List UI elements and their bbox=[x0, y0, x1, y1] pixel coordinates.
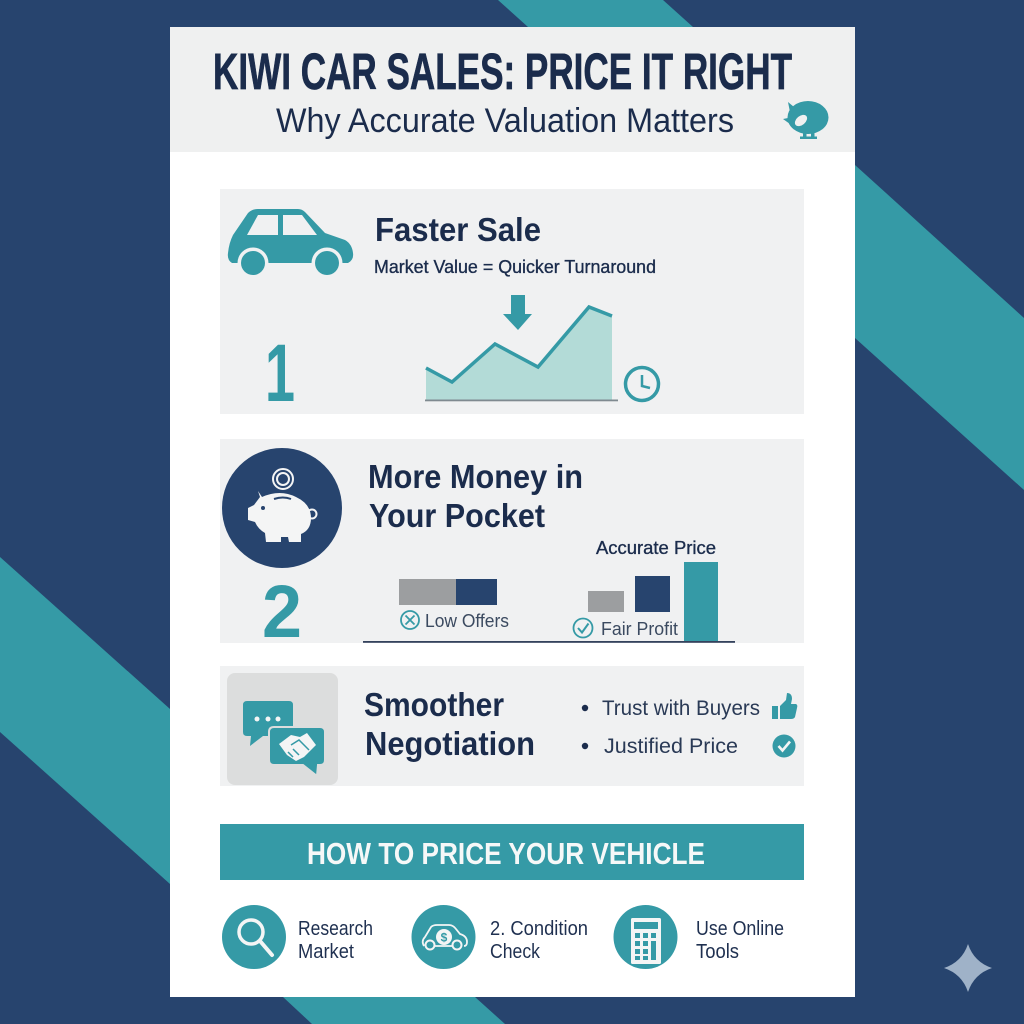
panel: header bbox=[170, 27, 855, 152]
heading: smoother negotiation: Negotiation bbox=[365, 725, 535, 762]
icon: sparkle watermark bbox=[944, 944, 992, 992]
bar: low offers bbox=[399, 579, 497, 605]
step: condition check bbox=[412, 905, 594, 969]
icon: car with dollar: $ bbox=[441, 930, 448, 944]
icon: clock bbox=[626, 368, 658, 400]
bullet: justified price: Justified Price bbox=[604, 735, 738, 758]
icon: check badge bbox=[772, 734, 796, 758]
banner: how to price bbox=[220, 824, 804, 880]
heading: faster sale: Faster Sale bbox=[375, 211, 541, 248]
icon: piggy bank bbox=[222, 448, 342, 568]
panel: more money bbox=[220, 439, 804, 653]
icon: magnifier bbox=[239, 920, 272, 955]
panel: white card bbox=[170, 27, 855, 997]
arrow: down bbox=[503, 295, 532, 330]
number 2: 2 bbox=[262, 570, 302, 653]
icon: calculator bbox=[631, 918, 661, 964]
heading: smoother negotiation: Smoother bbox=[364, 686, 504, 723]
label: fair profit: Fair Profit bbox=[601, 619, 678, 639]
icon: car bbox=[228, 209, 353, 278]
icon: thumbs up bbox=[772, 693, 797, 719]
step: research market bbox=[222, 905, 379, 969]
bars: accurate price bbox=[588, 562, 718, 642]
icon: kiwi bird bbox=[783, 101, 828, 139]
label: research market: Market bbox=[298, 941, 354, 963]
bullet: trust with buyers: Trust with Buyers bbox=[602, 697, 760, 720]
label: condition check: 2. Condition bbox=[490, 918, 588, 940]
step: online tools bbox=[614, 905, 790, 969]
number 1: 1 bbox=[265, 328, 295, 419]
panel: smoother negotiation bbox=[220, 666, 804, 786]
heading: more money: More Money in bbox=[368, 458, 583, 495]
banner: how to price: HOW TO PRICE YOUR VEHICLE bbox=[307, 836, 705, 871]
label: online tools: Tools bbox=[696, 941, 739, 963]
icon: car with dollar bbox=[423, 925, 467, 950]
label: accurate price: Accurate Price bbox=[596, 538, 716, 558]
heading: more money: Your Pocket bbox=[369, 497, 545, 534]
subtitle: Why Accurate Valuation Matters bbox=[276, 102, 734, 140]
panel: faster sale bbox=[220, 189, 804, 419]
icon: chat and handshake bbox=[227, 673, 338, 785]
area chart bbox=[425, 307, 618, 401]
text: market value: Market Value = Quicker Turnaround bbox=[374, 257, 656, 277]
label: condition check: Check bbox=[490, 941, 541, 963]
label: online tools: Use Online bbox=[696, 918, 784, 940]
label: low offers: Low Offers bbox=[425, 611, 509, 631]
label: research market: Research bbox=[298, 918, 373, 940]
